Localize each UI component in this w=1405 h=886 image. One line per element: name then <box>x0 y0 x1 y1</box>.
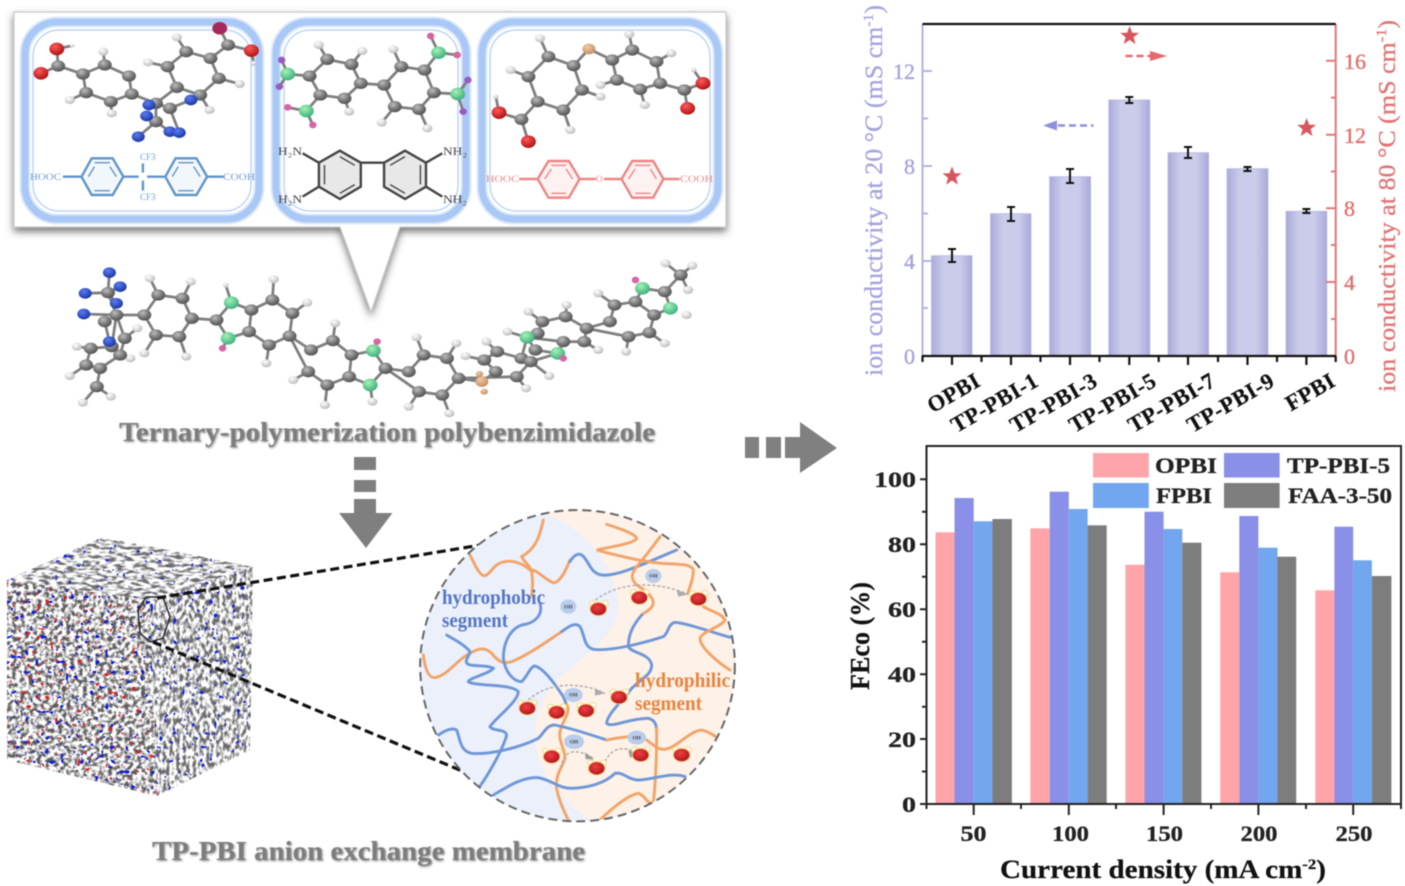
y axis title: FEco (%) <box>845 582 875 690</box>
right tick labels: 0 <box>1344 344 1355 369</box>
left axis title: ion conductivity at 20 °C (mS cm <box>861 40 888 376</box>
current density tick labels: 50 <box>960 821 986 846</box>
hydrophilic segment label: segment <box>635 691 702 715</box>
arrow: right axis indicator <box>1126 51 1167 61</box>
ball and stick: tetraamine <box>276 33 472 132</box>
cube front face <box>6 579 158 796</box>
magnified membrane circle <box>420 505 748 825</box>
callout background with pointer <box>14 12 726 312</box>
right tick labels: 16 <box>1344 49 1366 74</box>
formula labels: CF3 <box>140 192 156 202</box>
bar category labels: TP-PBI-3 <box>1005 368 1102 438</box>
hydroxide ions: OH <box>570 739 579 745</box>
conductivity bars <box>932 100 1327 356</box>
bar category labels: TP-PBI-7 <box>1123 368 1220 438</box>
FEco tick labels: 40 <box>888 662 916 687</box>
hydroxide ions: OH <box>564 604 573 610</box>
group 100 <box>1030 492 1107 804</box>
card: fluorinated diacid monomer <box>25 22 259 219</box>
bar category labels: TP-PBI-9 <box>1182 368 1278 438</box>
right axis title: -1 <box>1374 29 1390 42</box>
bar category labels: OPBI <box>923 368 984 418</box>
right axis <box>1326 24 1336 356</box>
bar category labels: TP-PBI-5 <box>1064 368 1160 438</box>
legend: TP-PBI-5 <box>1287 453 1390 478</box>
hydroxide ions: OH <box>649 574 658 580</box>
formula labels: CF3 <box>140 152 156 162</box>
current density tick labels: 250 <box>1336 821 1372 846</box>
structural formula: tetraamine rings <box>303 151 442 199</box>
hydrophobic segment label <box>442 585 545 632</box>
formula labels <box>30 146 714 206</box>
polymer ball-and-stick model <box>65 259 697 417</box>
group 50 <box>936 498 1012 804</box>
legend: FPBI <box>1156 483 1212 508</box>
left tick labels: 8 <box>904 154 915 179</box>
hydroxide ions <box>560 569 661 749</box>
molecule models in callout <box>34 22 710 199</box>
circle outline <box>420 510 735 821</box>
hydrophobic segment label: hydrophobic <box>442 585 545 609</box>
ball and stick: fluorinated diacid <box>34 22 259 142</box>
cube right face <box>150 566 254 796</box>
formula labels: COOH <box>680 174 714 184</box>
current density tick labels: 100 <box>1052 821 1089 846</box>
title: polymer name: Ternary-polymerization polybenzimidazole <box>119 417 655 447</box>
group 250 <box>1315 527 1391 804</box>
hydrophilic segment label <box>635 668 730 715</box>
formula labels: NH₂ <box>443 146 467 158</box>
polymer chains <box>423 520 730 820</box>
panel: monomer callout box <box>14 12 726 312</box>
left tick labels: 0 <box>904 344 915 369</box>
hydroxide ions: OH <box>633 735 642 741</box>
card: biphenyl tetraamine monomer <box>276 22 466 219</box>
right axis title: ion conductivity at 80 °C (mS cm <box>1375 69 1401 392</box>
x axis title: ) <box>1316 855 1326 884</box>
top and bottom axis lines <box>922 24 1336 365</box>
hydrophilic background <box>535 505 748 825</box>
formula labels: H₂N <box>278 146 303 158</box>
right axis title: ) <box>1375 20 1401 29</box>
bar category labels: TP-PBI-1 <box>946 368 1042 438</box>
FEco tick labels: 60 <box>888 597 916 622</box>
bar category labels <box>923 368 1340 438</box>
selected pore outline <box>138 597 170 642</box>
left tick labels: 4 <box>904 249 915 274</box>
left axis <box>922 24 932 356</box>
group 200 <box>1220 516 1296 804</box>
right tick labels: 4 <box>1344 270 1355 295</box>
hydrophilic segment label: hydrophilic <box>635 668 730 692</box>
structural formula: ether diacid rings <box>519 161 680 198</box>
membrane cube <box>0 530 260 800</box>
title: membrane name: TP-PBI anion exchange membrane <box>152 836 585 866</box>
FEco tick labels: 20 <box>888 727 916 752</box>
left axis title: ) <box>861 5 888 14</box>
current density tick labels: 200 <box>1240 821 1278 846</box>
cube top face <box>8 538 252 600</box>
formula labels: O <box>596 174 603 184</box>
chart: FEco bars <box>845 446 1401 884</box>
group 150 <box>1125 512 1201 804</box>
left tick labels: 12 <box>893 59 915 84</box>
water molecules <box>518 589 708 775</box>
legend: FAA-3-50 <box>1288 483 1392 508</box>
formula labels: H₂N <box>278 194 303 206</box>
hydrophobic segment label: segment <box>442 608 508 632</box>
bar category labels: FPBI <box>1281 368 1340 416</box>
star markers at 80 degrees <box>942 26 1316 185</box>
arrow: left axis indicator <box>1043 120 1094 130</box>
ion transport arrows <box>528 585 688 768</box>
hydroxide ions: OH <box>569 693 578 699</box>
current density tick labels: 150 <box>1146 821 1183 846</box>
chart: ion conductivity bars <box>861 5 1401 438</box>
FEco tick labels: 80 <box>888 532 916 557</box>
right tick labels <box>1344 49 1366 369</box>
arrow: dashed right arrow <box>745 422 837 473</box>
plot frame and ticks <box>920 446 1401 815</box>
FEco tick labels: 100 <box>874 467 916 492</box>
x axis title: Current density (mA cm <box>1000 855 1270 884</box>
formula labels: COOH <box>223 172 256 182</box>
ball and stick: ether diacid <box>492 30 710 148</box>
formula labels: NH₂ <box>443 194 467 206</box>
right tick labels: 8 <box>1344 196 1355 221</box>
right tick labels: 12 <box>1344 123 1366 148</box>
FEco tick labels <box>874 467 916 817</box>
left tick labels <box>893 59 915 369</box>
hydrophobic background <box>420 510 735 821</box>
FEco tick labels: 0 <box>902 792 916 817</box>
zoom guide lines <box>153 545 481 773</box>
arrow: dashed down arrow <box>339 457 392 548</box>
error bars <box>948 97 1310 262</box>
structural formula: fluorinated diacid rings <box>63 158 223 195</box>
formula labels: HOOC <box>486 174 519 184</box>
legend: OPBI <box>1155 453 1217 478</box>
formula labels: HOOC <box>30 172 61 182</box>
x axis title: -2 <box>1302 857 1316 873</box>
left axis title: -1 <box>861 14 877 27</box>
card: oxybis benzoic acid monomer <box>482 22 718 219</box>
legend <box>1093 453 1392 508</box>
current density tick labels <box>960 821 1372 846</box>
